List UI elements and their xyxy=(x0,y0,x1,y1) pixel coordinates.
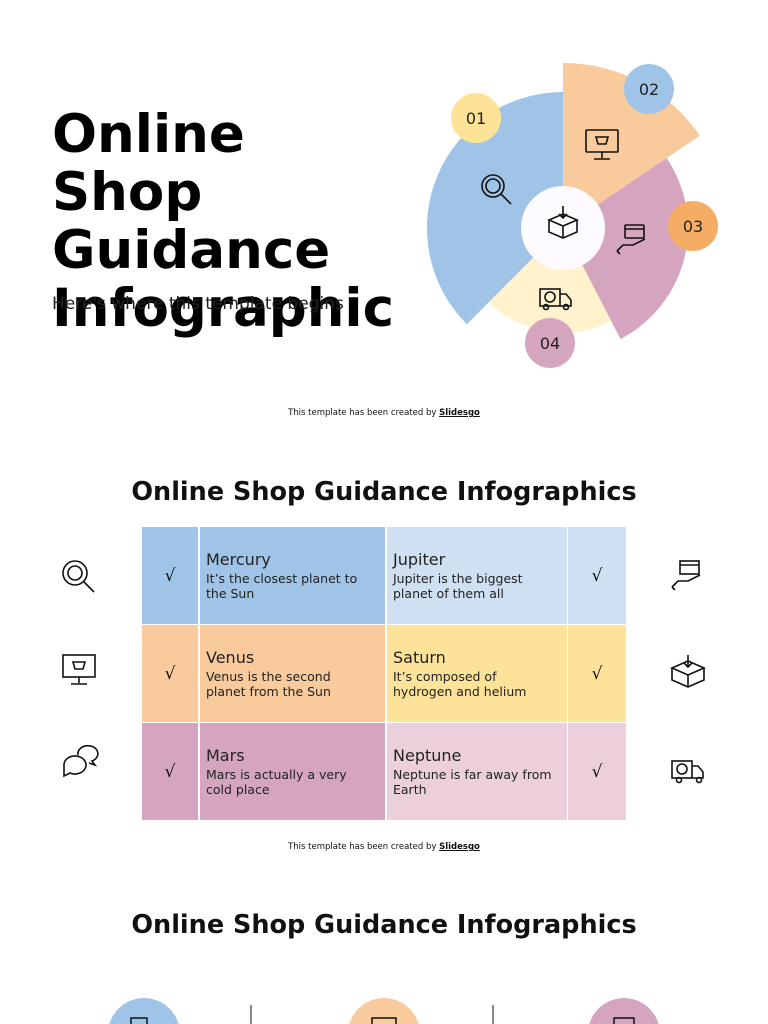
side icons xyxy=(62,560,706,784)
icon: truck xyxy=(540,289,571,310)
row 1: √ xyxy=(592,566,602,586)
row 2: √ xyxy=(592,664,602,684)
segment: cream xyxy=(489,228,611,333)
badge 04 xyxy=(525,318,575,368)
divider line xyxy=(250,1005,252,1024)
circle peach xyxy=(348,998,420,1024)
title xyxy=(52,104,394,339)
row 1: √ xyxy=(165,566,175,586)
badge 01: 01 xyxy=(466,109,486,128)
title: Infographic xyxy=(52,278,394,339)
row 2: Saturn xyxy=(393,648,446,667)
circle blue xyxy=(108,998,180,1024)
badge 01 xyxy=(451,93,501,143)
title: Shop xyxy=(52,162,202,223)
segment: pink xyxy=(563,158,688,339)
row 1: It’s the closest planet to the Sun xyxy=(206,571,357,601)
icon: card hand xyxy=(617,225,645,254)
row 1: Jupiter xyxy=(393,550,445,569)
row 3: Mars xyxy=(206,746,245,765)
badge 03: 03 xyxy=(683,217,703,236)
row 1: Jupiter is the biggest planet of them all xyxy=(393,571,523,601)
center circle with box icon xyxy=(521,186,605,270)
credit 1: This template has been created by Slidesgo xyxy=(288,408,480,418)
icon: truck xyxy=(672,761,703,782)
row 3: Neptune xyxy=(393,746,461,765)
icon: card hand xyxy=(672,561,700,590)
row 1: Mercury xyxy=(206,550,271,569)
heading 2: Online Shop Guidance Infographics xyxy=(131,477,637,507)
icon: search bag xyxy=(482,175,511,204)
badge 03 xyxy=(668,201,718,251)
row 3: √ xyxy=(165,762,175,782)
row 2: Venus xyxy=(206,648,254,667)
icon: monitor xyxy=(586,130,618,159)
icon: search xyxy=(63,561,94,592)
row 2: √ xyxy=(165,664,175,684)
row 2: Venus is the second planet from the Sun xyxy=(206,669,331,699)
row 3 xyxy=(142,723,626,820)
title: Online xyxy=(52,104,245,165)
icon: monitor xyxy=(63,655,95,684)
row 3: √ xyxy=(592,762,602,782)
icon: box xyxy=(672,655,704,687)
credit 2: This template has been created by Slidesgo xyxy=(288,842,480,852)
badge 02: 02 xyxy=(639,80,659,99)
row 2 xyxy=(142,625,626,722)
segment: blue xyxy=(427,92,563,324)
bottom circles xyxy=(110,998,658,1024)
row 3: Neptune is far away from Earth xyxy=(393,767,552,797)
badge 04: 04 xyxy=(540,334,560,353)
row 3: Mars is actually a very cold place xyxy=(206,767,347,797)
pie chart xyxy=(426,63,718,368)
icon: chat xyxy=(64,746,98,776)
circle pink xyxy=(588,998,660,1024)
subtitle: Here's where this template begins xyxy=(52,294,344,314)
title: Guidance xyxy=(52,220,330,281)
table xyxy=(142,527,626,820)
heading 3: Online Shop Guidance Infographics xyxy=(131,910,637,940)
segment: peach xyxy=(563,63,700,228)
badge 02 xyxy=(624,64,674,114)
row 1 xyxy=(142,527,626,624)
row 2: It’s composed of hydrogen and helium xyxy=(393,669,526,699)
